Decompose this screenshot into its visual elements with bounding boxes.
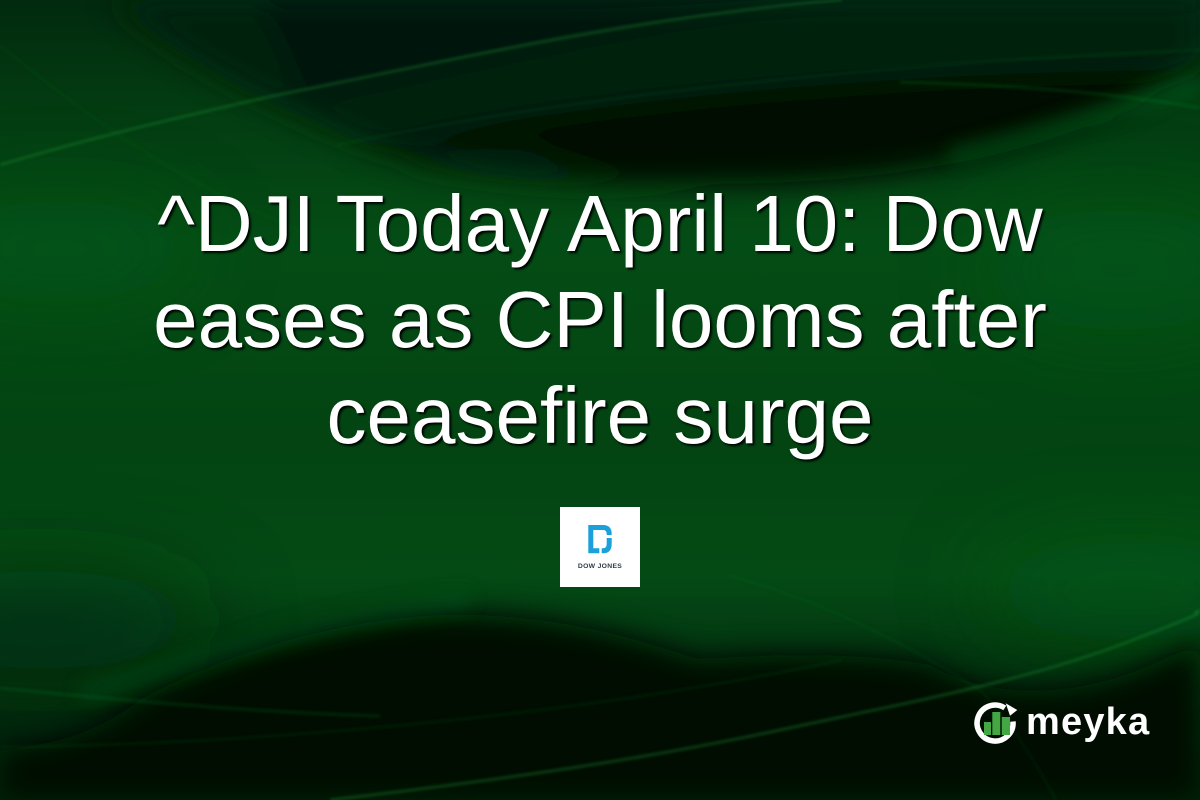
title: ceasefire surge [327, 371, 873, 460]
wordmark: meyka: meyka [1026, 701, 1150, 743]
title [153, 179, 1049, 462]
bright bands [950, 85, 1200, 155]
title: ^DJI Today April 10: Dow [157, 179, 1043, 268]
top dark lens [360, 70, 1180, 184]
top dark sweep [110, 0, 1200, 185]
bottom dark dome [0, 615, 1200, 800]
fine streaks [0, 0, 842, 165]
bottom sweep fade [0, 660, 1000, 800]
Meyka brand logo [974, 701, 1150, 744]
Dow Jones logo [560, 507, 640, 587]
icon: circular arrow with bars [977, 703, 1017, 741]
title: eases as CPI looms after [153, 275, 1047, 364]
icon: D mark [588, 525, 612, 553]
logo wordmark: DOW JONES [578, 563, 622, 570]
